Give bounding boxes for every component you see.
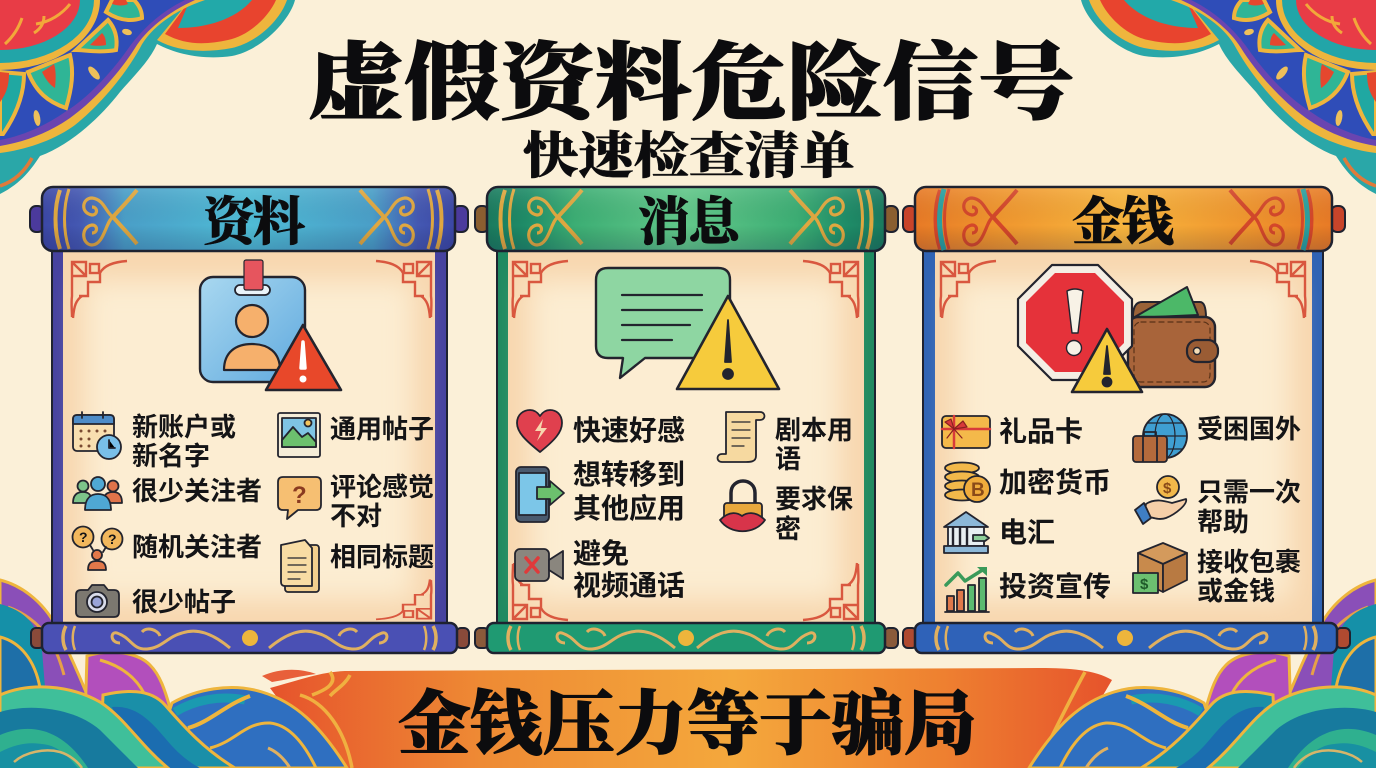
item: 评论感觉不对: 评论感觉 xyxy=(330,472,434,502)
item: 避免视频通话: 视频通话 xyxy=(573,570,685,601)
top roller xyxy=(30,187,468,251)
icon: picture xyxy=(278,413,320,457)
item: 接收包裹或金钱: 接收包裹 xyxy=(1197,547,1301,577)
panel: 金钱 xyxy=(903,187,1350,653)
item: 通用帖子: 通用帖子 xyxy=(330,414,434,444)
top roller xyxy=(903,187,1345,251)
item: 礼品卡: 礼品卡 xyxy=(999,416,1083,447)
item: 快速好感 xyxy=(517,410,685,452)
ornaments xyxy=(72,261,431,619)
icon: parcel and cash xyxy=(1133,543,1187,593)
corner: bottom right waves xyxy=(1029,580,1376,768)
heading: 金钱 xyxy=(1072,194,1174,252)
item: 想转移到其他应用 xyxy=(516,459,685,524)
item: 电汇 xyxy=(944,512,1055,553)
icon: person with question marks: ? xyxy=(108,531,117,547)
item: 很少帖子: 很少帖子 xyxy=(132,587,236,617)
icon: person with question marks xyxy=(72,526,122,570)
item: 只需一次帮助 xyxy=(1135,476,1301,537)
icon: gift card xyxy=(942,416,990,448)
item: 评论感觉不对: 不对 xyxy=(330,501,382,531)
bottom roller xyxy=(31,623,469,653)
item: 要求保密: 要求保 xyxy=(775,484,853,514)
item: 加密货币: 加密货币 xyxy=(999,467,1111,498)
paper xyxy=(52,245,447,627)
heading: 资料 xyxy=(203,194,305,252)
item: 很少帖子 xyxy=(76,585,236,617)
bottom banner xyxy=(262,668,1112,768)
ornaments xyxy=(941,261,1305,318)
subtitle: 快速检查清单 xyxy=(523,128,855,184)
item: 随机关注者 xyxy=(72,526,262,570)
item: 想转移到其他应用: 想转移到 xyxy=(573,459,685,490)
icon: chat bubble with warning xyxy=(596,268,779,389)
item: 相同标题 xyxy=(281,540,434,592)
item: 剧本用语: 语 xyxy=(775,444,801,474)
corner: bottom left waves xyxy=(0,580,347,768)
item: 评论感觉不对 xyxy=(278,472,434,531)
panel: 消息 xyxy=(475,187,898,653)
item: 剧本用语: 剧本用 xyxy=(775,415,853,445)
item: 剧本用语 xyxy=(718,412,853,474)
item: 电汇: 电汇 xyxy=(999,517,1055,548)
icon: coins bitcoin xyxy=(945,462,990,502)
item: 想转移到其他应用: 其他应用 xyxy=(573,493,685,524)
corner: top left mandala xyxy=(0,0,295,194)
icon: bank xyxy=(944,512,989,553)
item: 要求保密 xyxy=(720,481,853,544)
icon: id badge with warning xyxy=(200,260,341,390)
paper xyxy=(497,245,875,627)
icon: comment question xyxy=(278,477,321,519)
icon: video off xyxy=(515,549,563,581)
icon: camera xyxy=(76,585,119,617)
item: 新账户或新名字: 新账户或 xyxy=(132,412,236,442)
item: 新账户或新名字 xyxy=(73,412,236,471)
item: 接收包裹或金钱: 或金钱 xyxy=(1197,576,1275,606)
icon: person with question marks: ? xyxy=(79,529,88,545)
item: 投资宣传 xyxy=(945,567,1111,612)
icon: hand with coin xyxy=(1135,476,1186,524)
icon: coins bitcoin: B xyxy=(971,480,985,501)
item: 只需一次帮助: 只需一次 xyxy=(1197,477,1301,507)
banner text: 金钱压力等于骗局 xyxy=(398,686,976,764)
item: 受困国外: 受困国外 xyxy=(1197,414,1301,444)
icon: phone arrow xyxy=(516,467,564,522)
item: 礼品卡 xyxy=(942,416,1083,448)
icon: people xyxy=(73,477,122,510)
icon: calendar clock xyxy=(73,412,121,459)
item: 随机关注者: 随机关注者 xyxy=(132,532,262,562)
item: 要求保密: 密 xyxy=(775,514,801,544)
item: 快速好感: 快速好感 xyxy=(573,415,685,446)
icon: stop sign, wallet and warning xyxy=(1018,265,1218,392)
item: 加密货币 xyxy=(945,462,1111,502)
item: 只需一次帮助: 帮助 xyxy=(1197,507,1249,537)
bottom roller xyxy=(903,623,1350,653)
icon: documents xyxy=(281,540,319,592)
corner: top right mandala xyxy=(1081,0,1376,194)
paper xyxy=(923,245,1323,627)
item: 通用帖子 xyxy=(278,413,434,457)
top roller xyxy=(475,187,898,251)
icon: growth chart xyxy=(945,567,989,612)
icon: script xyxy=(718,412,764,462)
panel: 资料 xyxy=(30,187,469,653)
icon: hand with coin: $ xyxy=(1163,480,1172,497)
item: 避免视频通话: 避免 xyxy=(573,538,629,569)
icon: comment question: ? xyxy=(292,482,307,509)
title: 虚假资料危险信号 xyxy=(308,38,1074,131)
icon: parcel and cash: $ xyxy=(1140,576,1149,593)
ornaments xyxy=(513,261,858,620)
icon: lock lips xyxy=(720,481,765,531)
bottom roller xyxy=(475,623,898,653)
item: 避免视频通话 xyxy=(515,538,685,601)
item: 投资宣传: 投资宣传 xyxy=(999,571,1111,602)
heading: 消息 xyxy=(638,194,744,252)
item: 很少关注者: 很少关注者 xyxy=(132,476,262,506)
item: 新账户或新名字: 新名字 xyxy=(132,441,210,471)
item: 相同标题: 相同标题 xyxy=(330,542,434,572)
item: 接收包裹或金钱 xyxy=(1133,543,1301,606)
icon: globe suitcase xyxy=(1133,414,1187,462)
icon: heart xyxy=(517,410,562,452)
item: 很少关注者 xyxy=(73,476,262,510)
item: 受困国外 xyxy=(1133,414,1301,462)
